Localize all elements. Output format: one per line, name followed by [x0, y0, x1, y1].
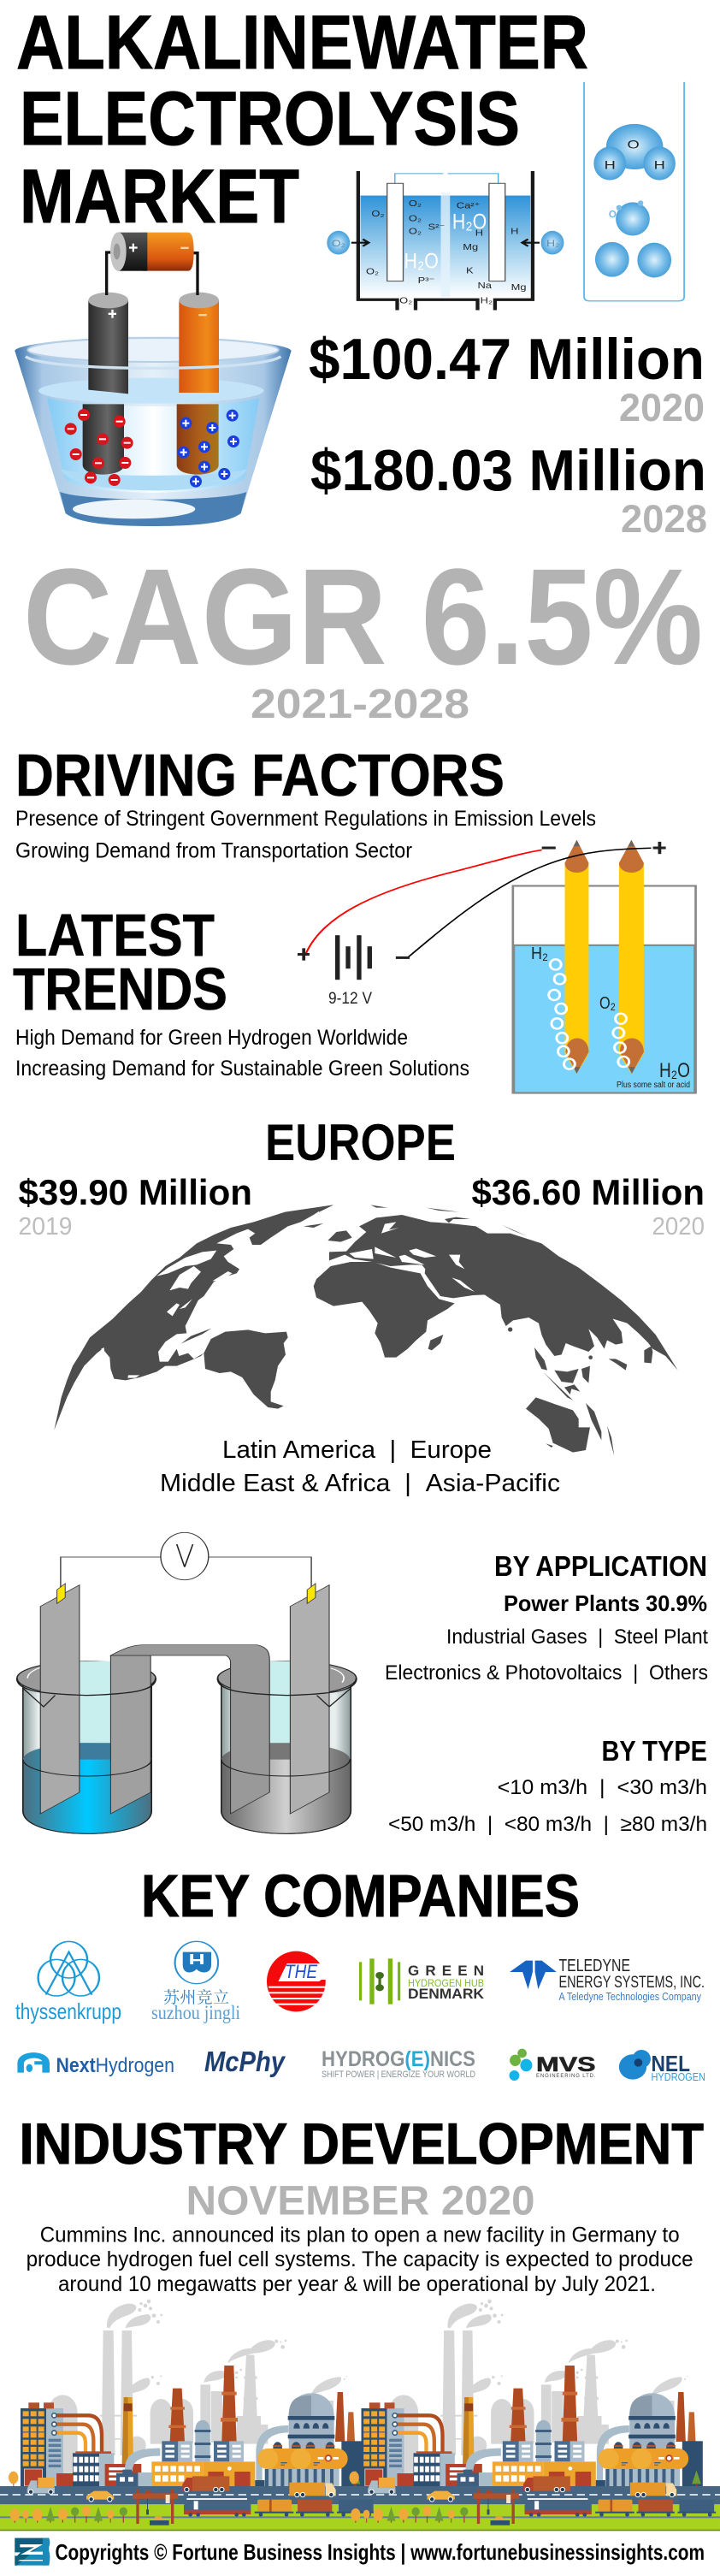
- illustration: industrial skyline: [0, 2300, 720, 2531]
- logo: Green Hydrogen Hub Denmark: GREEN: [408, 1963, 484, 1979]
- market value 2020: [309, 327, 705, 429]
- logo: MVS Engineering: ENGINEERING LTD.: [536, 2074, 596, 2079]
- text: development description: Cummins Inc. announced its plan to open a new facility in Germany to: [40, 2224, 680, 2247]
- heading: latest trends: [13, 902, 227, 1022]
- Europe value 2019: $39.90 Million: [19, 1172, 252, 1212]
- logo: McPhy: McPhy: [204, 2046, 286, 2077]
- segment: by type: <50 m3/h | <80 m3/h | ≥80 m3/h: [388, 1813, 707, 1836]
- logo: Green Hydrogen Hub Denmark: [359, 1958, 485, 2005]
- market value 2020: $100.47 Million: [309, 327, 705, 392]
- logo: Green Hydrogen Hub Denmark: DENMARK: [408, 1986, 485, 2002]
- logo: thyssenkrupp: thyssenkrupp: [15, 1999, 121, 2024]
- Europe value 2019: 2019: [19, 1213, 72, 1241]
- logo: THE: [267, 1951, 326, 2011]
- text: driving factors list: [15, 807, 596, 862]
- icon: electrolysis tank diagram: O₂: [409, 215, 422, 223]
- text: regions: Middle East & Africa | Asia-Pacific: [160, 1470, 560, 1497]
- icon: galvanic cell with salt bridge: [17, 1532, 357, 1833]
- icon: electrolysis tank diagram: H₂O: [404, 249, 439, 273]
- logo: Teledyne: TELEDYNE: [559, 1957, 630, 1975]
- segment: by application: Industrial Gases | Steel Plant: [446, 1626, 708, 1649]
- icon: electrolysis tank diagram: H: [510, 228, 518, 236]
- icon: electrolysis tank diagram: S²⁻: [428, 223, 445, 232]
- Europe value 2020: [472, 1172, 705, 1241]
- icon: water molecule panel: [584, 82, 684, 301]
- icon: electrolysis tank diagram: O₂: [366, 268, 379, 276]
- Europe value 2020: 2020: [652, 1213, 705, 1241]
- CAGR figure: 2021-2028: [251, 682, 469, 727]
- text: regions: [160, 1436, 560, 1497]
- segment: by application: [385, 1550, 708, 1685]
- icon: electrolysis tank diagram: Ca²⁺: [457, 202, 480, 210]
- logo: NEL Hydrogen: [619, 2050, 705, 2083]
- text: development description: around 10 megawatts per year & will be operational by July 2021.: [58, 2272, 656, 2296]
- icon: electrolysis tank diagram: O₂: [399, 297, 412, 305]
- text: development description: [27, 2224, 693, 2296]
- logo: Hydrogenics: HYDROG(E)NICS: [322, 2047, 475, 2071]
- title: ALKALINEWATER: [16, 0, 588, 85]
- text: regions: Latin America | Europe: [222, 1436, 492, 1464]
- diagram: pencil electrolysis: 9-12 V: [328, 990, 372, 1008]
- segment: by application: Power Plants 30.9%: [504, 1590, 707, 1616]
- icon: electrolysis tank diagram: O₂: [332, 238, 345, 248]
- icon: electrolysis tank diagram: Mg: [511, 283, 527, 292]
- Europe value 2020: $36.60 Million: [472, 1172, 705, 1212]
- logo: THE: THE: [285, 1961, 317, 1982]
- logo: NextHydrogen: [17, 2052, 174, 2077]
- icon: electrolysis tank diagram: H₂: [546, 238, 560, 248]
- date: November 2020: NOVEMBER 2020: [186, 2178, 535, 2224]
- logo: Fortune Business Insights: [15, 2538, 50, 2566]
- text: latest trends list: High Demand for Green Hydrogen Worldwide: [15, 1026, 408, 1050]
- icon: electrolysis tank diagram: Mg: [463, 243, 478, 252]
- icon: electrolysis tank diagram: H₂: [481, 297, 493, 305]
- heading: Europe: EUROPE: [265, 1114, 456, 1171]
- logo: NEL Hydrogen: NEL: [652, 2051, 690, 2076]
- diagram: pencil electrolysis: O₂: [599, 994, 616, 1013]
- segment: by type: <10 m3/h | <30 m3/h: [498, 1776, 707, 1799]
- text: development description: produce hydrogen fuel cell systems. The capacity is expected to produce: [27, 2247, 693, 2271]
- icon: electrolysis tank diagram: [327, 171, 564, 310]
- logo: Teledyne: [510, 1957, 705, 2003]
- logo: MVS Engineering: [510, 2049, 596, 2081]
- icon: electrolysis tank diagram: Na: [477, 281, 493, 291]
- title: ELECTROLYSIS: [20, 75, 520, 161]
- Europe value 2019: [19, 1172, 252, 1241]
- logo: suzhou jingli: suzhou jingli: [151, 2002, 240, 2023]
- logo: suzhou jingli: [151, 1941, 240, 2023]
- diagram: pencil electrolysis: H₂O: [659, 1059, 690, 1082]
- icon: electrolysis tank diagram: O₂: [409, 199, 422, 208]
- heading: latest trends: TRENDS: [13, 956, 227, 1022]
- icon: battery and beaker with electrodes: [15, 232, 292, 526]
- logo: Hydrogenics: SHIFT POWER | ENERGIZE YOUR WORLD: [322, 2070, 475, 2080]
- text: latest trends list: Increasing Demand for Sustainable Green Solutions: [15, 1057, 469, 1081]
- segment: by type: [388, 1735, 707, 1836]
- icon: water molecule panel: H: [654, 159, 665, 172]
- icon: water molecule panel: O: [628, 138, 640, 151]
- world map: [54, 1205, 678, 1456]
- market value 2020: 2020: [619, 386, 705, 429]
- icon: electrolysis tank diagram: O₂: [409, 228, 422, 236]
- segment: by type: BY TYPE: [602, 1735, 707, 1767]
- diagram: pencil electrolysis: H₂: [531, 945, 548, 963]
- icon: electrolysis tank diagram: P³⁻: [418, 276, 434, 286]
- heading: latest trends: LATEST: [15, 902, 215, 968]
- logo: Green Hydrogen Hub Denmark: HYDROGEN HUB: [408, 1977, 484, 1989]
- logo: NEL Hydrogen: HYDROGEN: [652, 2070, 705, 2083]
- market value 2028: [310, 438, 707, 541]
- text: driving factors list: Presence of Stringent Government Regulations in Emission Levels: [15, 807, 596, 831]
- icon: electrolysis tank diagram: K: [466, 267, 474, 275]
- title: [16, 0, 588, 239]
- diagram: pencil electrolysis: Plus some salt or acid: [617, 1081, 690, 1090]
- logo: suzhou jingli: 苏州竞立: [163, 1988, 229, 2007]
- icon: electrolysis tank diagram: H₂O: [452, 210, 487, 234]
- heading: driving factors: DRIVING FACTORS: [15, 742, 505, 808]
- icon: water molecule panel: H: [605, 159, 616, 172]
- title: MARKET: [20, 153, 299, 239]
- logo: NextHydrogen: NextHydrogen: [56, 2054, 174, 2077]
- text: latest trends list: [15, 1026, 469, 1081]
- logo: MVS Engineering: MVS: [536, 2053, 595, 2076]
- logo: thyssenkrupp: [15, 1941, 121, 2024]
- icon: electrolysis tank diagram: O₂: [371, 210, 384, 219]
- text: driving factors list: Growing Demand from Transportation Sector: [15, 838, 412, 862]
- icon: electrolysis tank diagram: H: [475, 229, 483, 238]
- diagram: pencil electrolysis: [298, 840, 696, 1093]
- market value 2028: 2028: [621, 497, 707, 541]
- heading: key companies: KEY COMPANIES: [141, 1862, 580, 1929]
- market value 2028: $180.03 Million: [310, 438, 706, 503]
- segment: by application: Electronics & Photovoltaics | Others: [385, 1661, 708, 1685]
